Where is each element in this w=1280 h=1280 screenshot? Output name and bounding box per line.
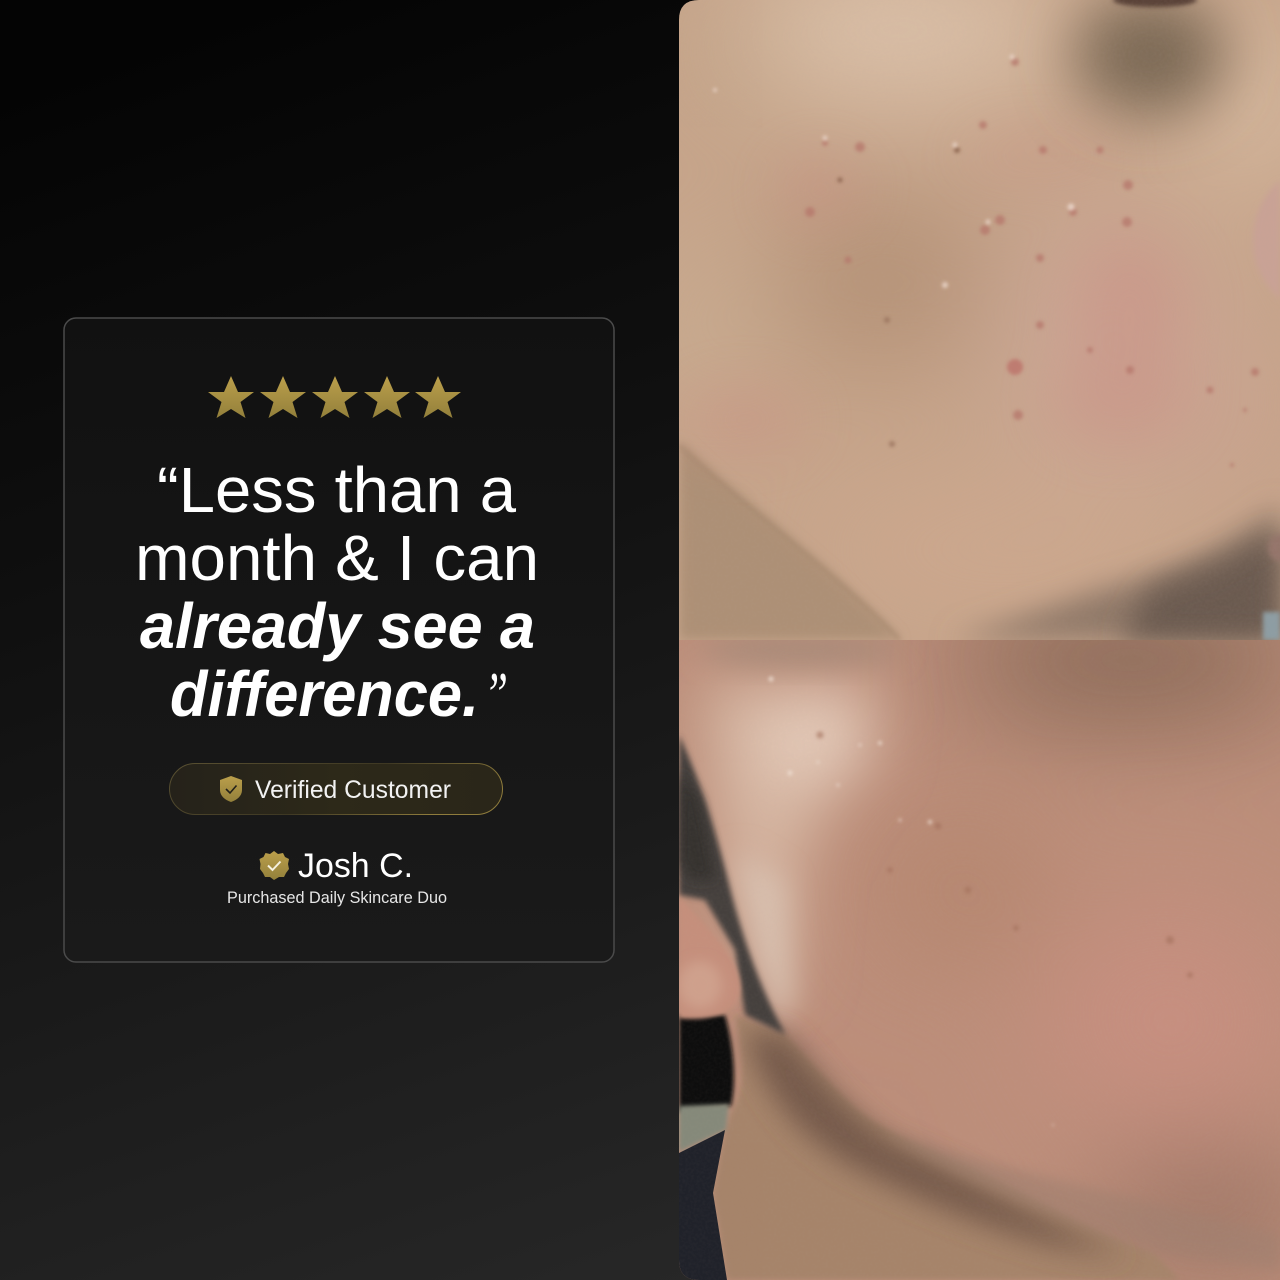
eye socket shadow [1075, 0, 1225, 115]
neck [713, 1015, 1180, 1280]
quote text: difference. [170, 658, 479, 730]
remaining texture spots [768, 676, 1054, 1126]
photo: before, skin with breakouts [670, 0, 1280, 640]
cheek highlight [700, 680, 880, 1000]
quote text: ” [484, 659, 508, 730]
breakouts [805, 58, 1259, 467]
icon: gold verified seal [260, 851, 289, 880]
panel: testimonial card [64, 318, 614, 962]
shadow under jaw [745, 1030, 1130, 1258]
icon: gold shield [220, 776, 242, 802]
reviewer name: Josh C. [298, 847, 413, 885]
badge label: Verified Customer [255, 776, 451, 804]
purchased product line: Purchased Daily Skincare Duo [227, 889, 447, 907]
icon: five gold stars [208, 376, 461, 418]
photo: after, clearer skin [678, 610, 1280, 1280]
whiteheads [713, 54, 1074, 288]
badge: verified customer pill [170, 764, 502, 814]
reviewer name with icon [260, 847, 413, 885]
quote text: already see a [140, 590, 535, 662]
dark area behind ear [679, 1015, 734, 1112]
quote text: “Less than a [157, 454, 516, 526]
skin grain [679, 640, 1280, 1280]
ear [679, 897, 740, 1019]
hair and sideburn [679, 735, 786, 1035]
jaw underside [937, 1158, 1274, 1261]
nose [1258, 198, 1278, 290]
skin beside sideburn [735, 850, 795, 1030]
quote text: month & I can [135, 522, 539, 594]
quote text [135, 454, 539, 730]
redness patches [1077, 254, 1174, 428]
skin grain [679, 0, 1280, 640]
lower lip hint [1268, 534, 1280, 562]
jaw and neck shadow [679, 440, 900, 640]
